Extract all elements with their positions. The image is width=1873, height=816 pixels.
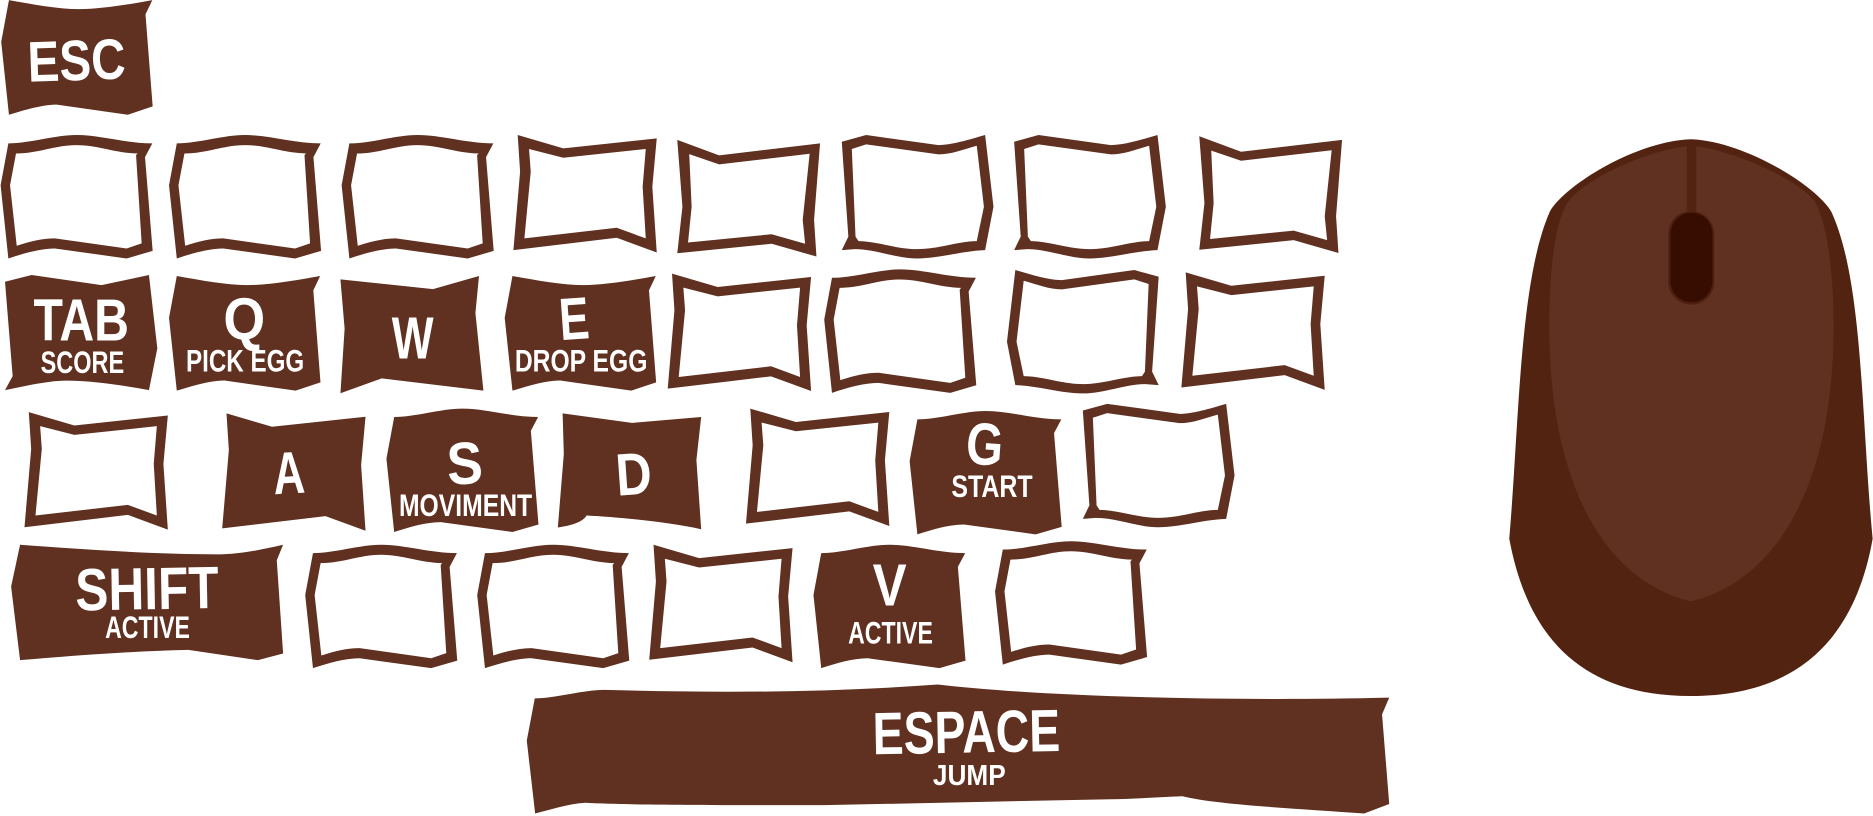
scroll wheel <box>1671 213 1712 302</box>
key: ESC: ESC <box>26 27 127 95</box>
key: Q pick egg: Q <box>223 285 265 352</box>
mouse body <box>1509 139 1873 696</box>
blank key 5 <box>668 274 811 391</box>
mouse top panel <box>1549 146 1834 602</box>
key: V active <box>813 545 966 668</box>
key: TAB score <box>5 275 157 390</box>
blank key 7 <box>1007 270 1159 393</box>
keyboard row 1: blank keys <box>1 135 1342 258</box>
blank key 7 <box>1014 135 1166 258</box>
key: ESPACE jump <box>527 685 1389 814</box>
key: E drop egg: DROP EGG <box>515 344 647 379</box>
blank key 8 <box>1181 272 1325 390</box>
blank key: row 3 start <box>24 412 168 530</box>
key: TAB score: TAB <box>33 287 129 354</box>
key: E drop egg <box>505 276 656 391</box>
blank key 8 <box>1199 136 1342 253</box>
key: V active: V <box>873 552 907 619</box>
blank key 1 <box>1 135 153 258</box>
key: Q pick egg: PICK EGG <box>186 344 304 379</box>
key: Q pick egg <box>169 276 320 391</box>
blank key 3 <box>477 545 629 668</box>
key: SHIFT active: ACTIVE <box>105 610 190 645</box>
blank key 6 <box>824 269 976 393</box>
key: A: A <box>271 439 306 507</box>
blank key 4 <box>649 545 793 662</box>
key: S movement: S <box>445 429 484 498</box>
key: SHIFT active: SHIFT <box>75 554 219 624</box>
key: SHIFT active <box>11 545 283 660</box>
key: ESPACE jump: ESPACE <box>872 697 1061 767</box>
icon: mouse <box>1509 139 1873 696</box>
keyboard row 2: blank keys <box>668 269 1325 393</box>
blank key 2 <box>169 135 321 258</box>
blank key 3 <box>342 135 494 258</box>
key: V active: ACTIVE <box>848 615 933 650</box>
blank key 2 <box>305 545 457 668</box>
key: S movement <box>386 409 538 532</box>
key: E drop egg: E <box>557 284 591 353</box>
blank key 6 <box>842 135 993 258</box>
scroll wheel housing <box>1668 211 1714 305</box>
blank key: row 3 end <box>1083 404 1235 527</box>
blank key 5 <box>677 140 820 257</box>
key: S movement: MOVIMENT <box>399 488 532 523</box>
key: ESPACE jump: JUMP <box>933 760 1006 792</box>
blank key 4 <box>513 135 657 252</box>
key: D <box>558 413 701 529</box>
key: W: W <box>392 304 434 371</box>
key: D: D <box>614 439 654 509</box>
key: A <box>222 413 366 531</box>
key: G start: G <box>964 410 1006 479</box>
key: TAB score: SCORE <box>41 345 124 380</box>
key: G start <box>910 410 1062 534</box>
blank key: row 4 end <box>995 541 1147 665</box>
blank key: row 3 middle <box>746 409 889 526</box>
key: ESC <box>1 0 153 115</box>
keyboard row 4: blank keys <box>305 545 793 668</box>
key: G start: START <box>951 469 1033 504</box>
button divider <box>1687 146 1696 213</box>
key: W <box>340 276 483 393</box>
